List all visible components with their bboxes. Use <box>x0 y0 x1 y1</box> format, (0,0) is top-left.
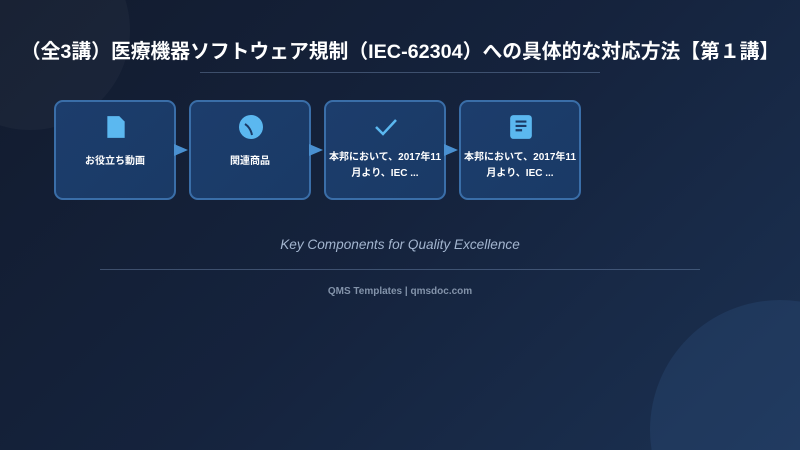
step 3 card: 月より、IEC ... <box>351 168 419 179</box>
step 3 card <box>324 100 446 200</box>
step 4 card: 本邦において、2017年11 <box>464 152 576 163</box>
arrow 1 <box>174 144 188 156</box>
icon: check <box>375 119 397 136</box>
footer: QMS Templates | qmsdoc.com <box>328 286 472 297</box>
arrow 3 <box>444 144 458 156</box>
step 2 card: 関連商品 <box>230 156 270 167</box>
step 4 card: 月より、IEC ... <box>486 168 554 179</box>
subtitle: Key Components for Quality Excellence <box>280 237 520 252</box>
icon: file <box>107 116 125 138</box>
step 3 card: 本邦において、2017年11 <box>329 152 441 163</box>
icon: globe <box>239 115 263 139</box>
arrow 2 <box>309 144 323 156</box>
step 2 card <box>189 100 311 200</box>
step 1 card <box>54 100 176 200</box>
step 1 card: お役立ち動画 <box>85 156 145 167</box>
icon: document <box>510 115 532 139</box>
step 4 card <box>459 100 581 200</box>
title: （全3講）医療機器ソフトウェア規制（IEC-62304）への具体的な対応方法【第１講】 <box>21 41 779 63</box>
